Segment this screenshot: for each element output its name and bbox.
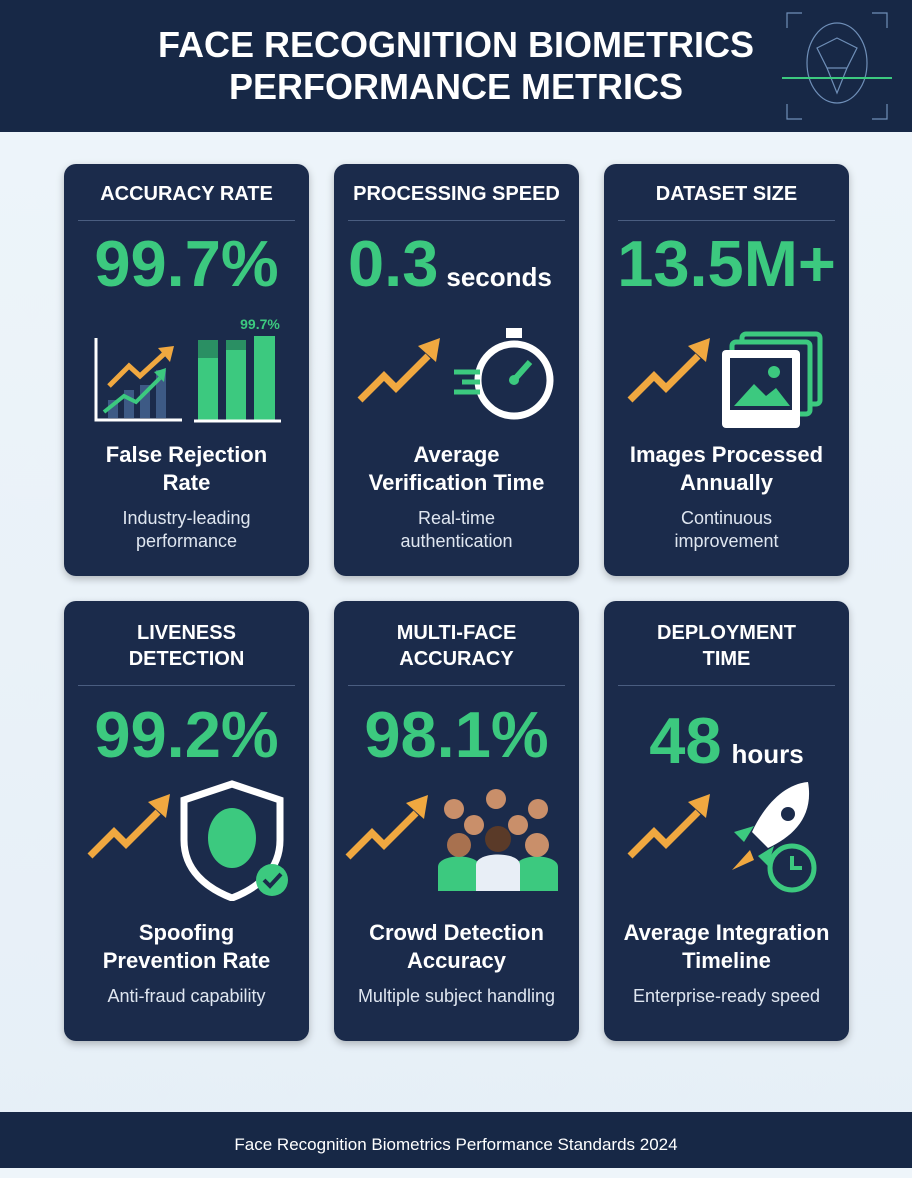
panel: processing speed [334,164,579,576]
title: PERFORMANCE METRICS [229,66,683,107]
label [630,442,823,495]
label: Timeline [682,948,771,973]
heading: LIVENESS [137,622,236,644]
heading: ACCURACY RATE [100,183,273,205]
label: Annually [680,470,773,495]
heading [129,622,244,670]
label: Images Processed [630,442,823,467]
number: 0.3 seconds [348,227,552,300]
number: 99.2% [94,698,279,771]
heading [657,622,796,670]
heading: DATASET SIZE [656,183,797,205]
subtext [674,508,779,551]
label: Prevention Rate [103,948,270,973]
subtext: Continuous [681,508,772,528]
panel: accuracy rate [64,164,309,576]
label: Average Integration [624,920,829,945]
label [368,442,544,495]
subtext: Enterprise-ready speed [633,986,820,1006]
footer [0,1112,912,1168]
heading [397,622,516,670]
subtext: improvement [674,531,779,551]
label: False Rejection [106,442,267,467]
subtext [122,508,251,551]
heading: DETECTION [129,648,244,670]
icon: rocket and clock [628,782,816,892]
panel: dataset size [604,164,849,576]
icon: charts: 99.7% [240,316,280,332]
label [624,920,829,973]
title: FACE RECOGNITION BIOMETRICS [158,24,754,65]
number: 48 hours [649,704,804,777]
heading: DEPLOYMENT [657,622,796,644]
subtext: Multiple subject handling [358,986,555,1006]
icon: shield face [88,780,288,901]
subtext: Anti-fraud capability [107,986,266,1006]
label: Rate [163,470,210,495]
icon: arrow and images [628,332,822,428]
subtext: Real-time [418,508,495,528]
subtext: performance [136,531,237,551]
subtext: Industry-leading [122,508,251,528]
label: Verification Time [369,470,544,495]
subtext: authentication [400,531,513,551]
title [158,24,754,107]
label [106,442,267,495]
heading: TIME [703,648,750,670]
label: Accuracy [407,948,506,973]
header [0,0,912,132]
number: 13.5M+ [617,227,836,300]
label: Spoofing [139,920,234,945]
heading: ACCURACY [399,648,514,670]
panel: multi-face accuracy [334,601,579,1041]
panel: liveness detection [64,601,309,1041]
icon: charts [94,316,281,422]
label: Average [413,442,500,467]
icon: face scan [782,12,892,120]
label [369,920,544,973]
panel: deployment time [604,601,849,1041]
heading: PROCESSING SPEED [353,183,560,205]
number: 98.1% [364,698,549,771]
label [103,920,270,973]
number: 99.7% [94,227,279,300]
footer: Face Recognition Biometrics Performance Standards 2024 [234,1135,678,1154]
heading: MULTI-FACE [397,622,516,644]
subtext [400,508,513,551]
icon: crowd [346,789,558,891]
icon: arrow and stopwatch [358,328,554,420]
label: Crowd Detection [369,920,544,945]
